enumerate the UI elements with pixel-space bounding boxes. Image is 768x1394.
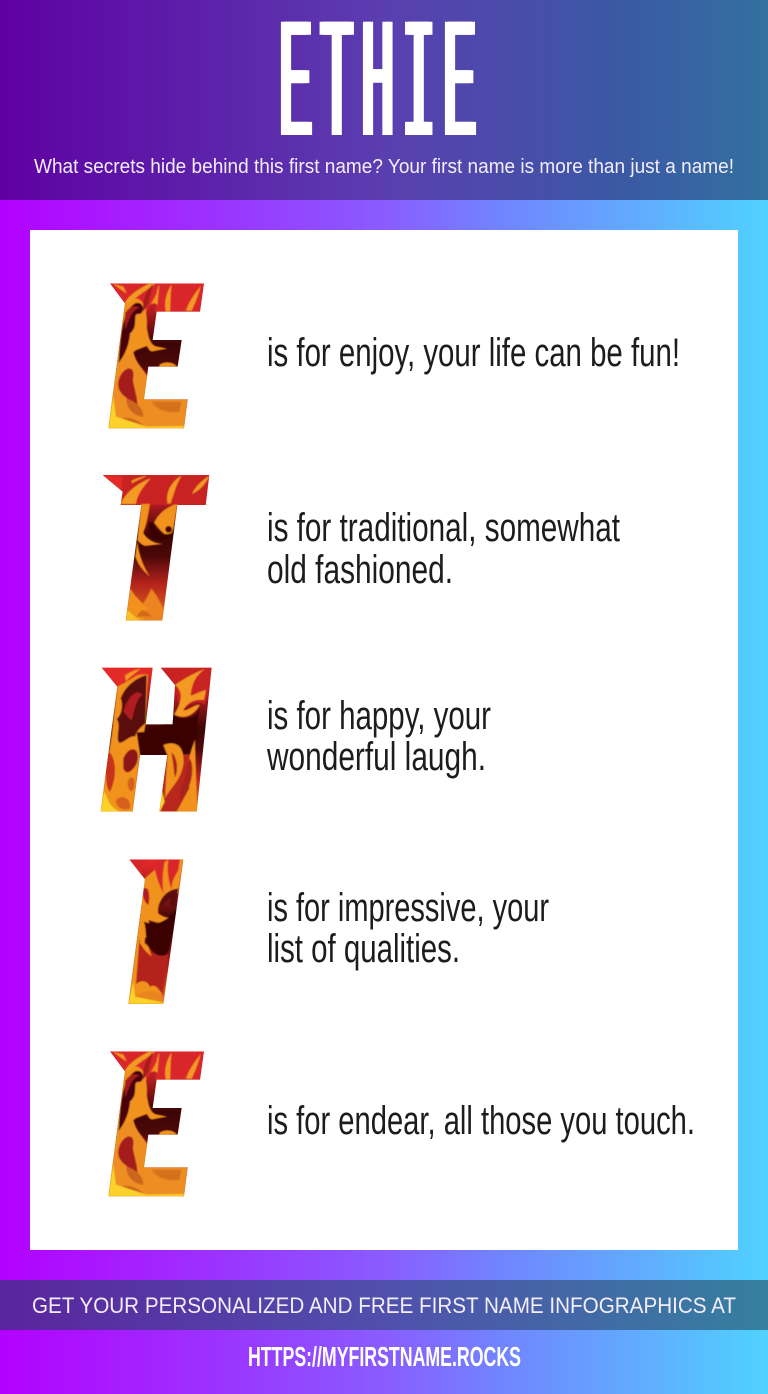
- icon: flame letter T: [100, 473, 212, 622]
- text: I row: [267, 886, 549, 971]
- icon: flame letter I: [127, 858, 185, 1005]
- text: T row: [267, 506, 620, 592]
- footer band: [0, 1280, 768, 1330]
- footer url: HTTPS://MYFIRSTNAME.ROCKS: [248, 1341, 521, 1372]
- icon: flame letter H: [98, 667, 213, 813]
- text: T row: is for traditional, somewhat: [267, 506, 620, 550]
- text: I row: list of qualities.: [267, 927, 460, 971]
- subtitle: What secrets hide behind this first name? Your first name is more than just a name!: [34, 156, 734, 178]
- text: I row: is for impressive, your: [267, 886, 549, 930]
- text: H row: wonderful laugh.: [266, 735, 486, 779]
- header band: [0, 0, 768, 200]
- text: H row: is for happy, your: [267, 694, 491, 738]
- footer call to action: GET YOUR PERSONALIZED AND FREE FIRST NAME INFOGRAPHICS AT: [32, 1293, 736, 1318]
- icon: flame letter E: [107, 282, 207, 430]
- text: T row: old fashioned.: [267, 548, 453, 592]
- text: H row: [266, 694, 491, 779]
- panel: white letters panel: [30, 230, 738, 1250]
- icon: flame letter E (second): [107, 1050, 207, 1198]
